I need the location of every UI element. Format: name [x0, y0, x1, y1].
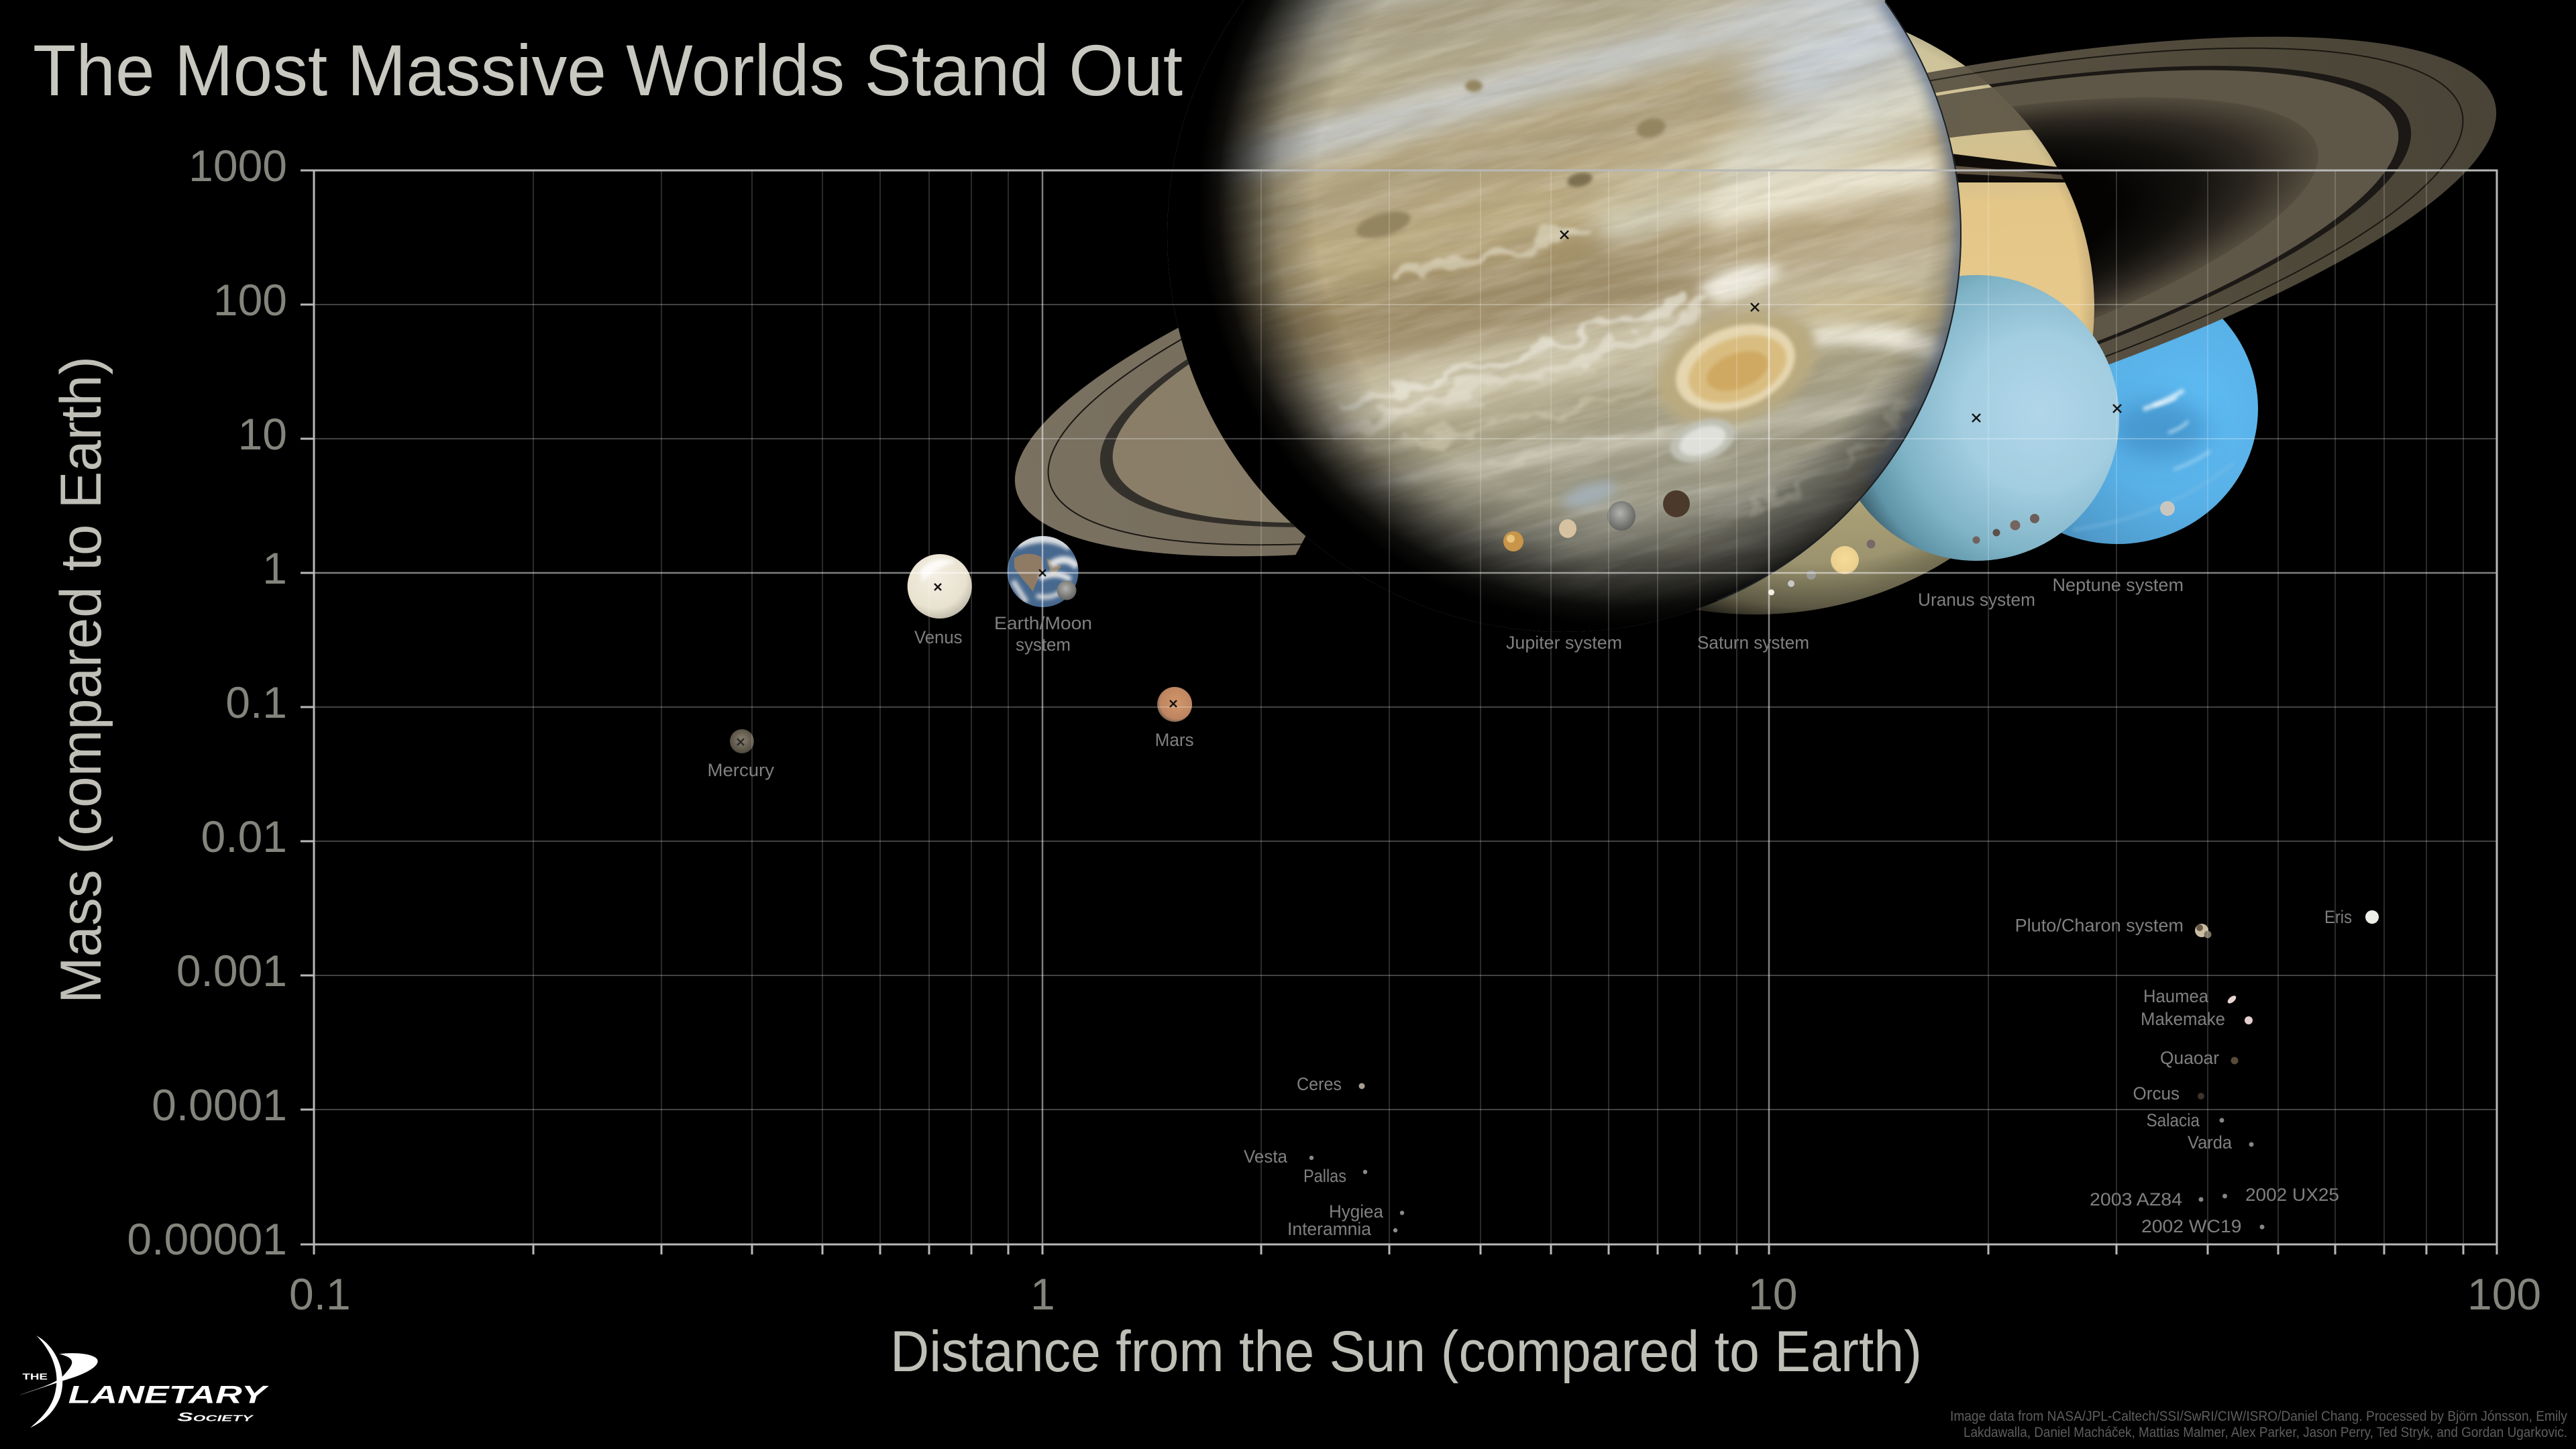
logo: The Planetary Society: THE [22, 1372, 48, 1382]
y axis tick labels: 1000 [189, 141, 287, 191]
planet: Jupiter [1042, 0, 2110, 765]
moons: Jupiter system [1503, 490, 1690, 551]
world labels: Saturn system [1697, 633, 1809, 653]
planet: Uranus [1833, 275, 2119, 561]
world labels: Mercury [707, 760, 775, 780]
world labels: Makemake [2141, 1009, 2225, 1029]
Saturn rings, left portion visible past Jupiter [1014, 327, 1305, 557]
moon: Triton [2160, 501, 2175, 516]
moons: Saturn system [1768, 539, 1876, 596]
world labels: Haumea [2143, 986, 2209, 1006]
world labels [707, 575, 2352, 1239]
x axis tick labels: 0.1 [289, 1269, 351, 1319]
x axis tick labels: 100 [2467, 1269, 2541, 1319]
asteroids and dwarf planets [1309, 910, 2379, 1232]
world labels: Varda [2188, 1132, 2233, 1152]
y axis title: Mass (compared to Earth) [49, 356, 113, 1004]
world labels: Vesta [1244, 1146, 1288, 1167]
world labels: Salacia [2147, 1110, 2200, 1130]
world labels: Pluto/Charon system [2015, 916, 2184, 936]
world labels: Neptune system [2053, 575, 2184, 595]
ring cut edge [1295, 510, 1644, 644]
y axis tick labels: 0.001 [176, 946, 287, 996]
world labels: Earth/Moon [994, 613, 1092, 633]
Saturn rings, far side (right portion) [1966, 36, 2497, 365]
world labels: Jupiter system [1506, 633, 1622, 653]
Saturn rings, near side over the globe [973, 0, 2495, 477]
planet: Venus [908, 554, 972, 619]
y axis tick labels: 1 [262, 543, 287, 593]
planet: Neptune [2061, 319, 2258, 544]
y axis tick labels: 10 [238, 409, 287, 459]
title: The Most Massive Worlds Stand Out [33, 30, 1183, 111]
planet: Saturn [1696, 32, 2094, 614]
logo: The Planetary Society [19, 1336, 270, 1428]
world labels: Uranus system [1918, 590, 2035, 610]
world labels: 2003 AZ84 [2090, 1189, 2182, 1210]
planet: Earth and Moon [1008, 536, 1079, 607]
y axis tick labels: 0.00001 [127, 1214, 287, 1264]
x axis title: Distance from the Sun (compared to Earth) [890, 1320, 1922, 1384]
world labels: system [1016, 635, 1071, 655]
world labels: Venus [914, 627, 962, 647]
world labels: 2002 WC19 [2141, 1216, 2242, 1236]
y axis tick labels: 100 [213, 275, 287, 325]
x axis tick labels: 10 [1748, 1269, 1797, 1319]
world labels: Orcus [2133, 1083, 2180, 1104]
logo: The Planetary Society: LANETARY [68, 1381, 270, 1409]
world labels: Mars [1155, 730, 1194, 750]
world labels: 2002 UX25 [2245, 1185, 2339, 1205]
y axis tick labels: 0.01 [201, 812, 287, 861]
y axis tick labels: 0.1 [225, 678, 287, 727]
world labels: Pallas [1303, 1166, 1346, 1186]
y axis tick labels [127, 141, 287, 1264]
y axis tick labels: 0.0001 [152, 1080, 287, 1130]
world labels: Quaoar [2160, 1048, 2219, 1068]
moons: Uranus system [1972, 514, 2039, 543]
chart grid and axes [301, 170, 2497, 1254]
centre-of-mass markers [737, 231, 2121, 745]
world labels: Ceres [1297, 1074, 1342, 1094]
planet: Mars [1157, 687, 1192, 722]
image credit [1950, 1409, 2567, 1440]
world labels: Interamnia [1287, 1219, 1372, 1239]
logo: The Planetary Society: S OCIETY [177, 1409, 255, 1424]
world labels: Eris [2324, 907, 2352, 927]
x axis tick labels [289, 1269, 2541, 1319]
x axis tick labels: 1 [1030, 1269, 1055, 1319]
planet: Mercury [730, 729, 754, 753]
world labels: Hygiea [1329, 1201, 1384, 1222]
